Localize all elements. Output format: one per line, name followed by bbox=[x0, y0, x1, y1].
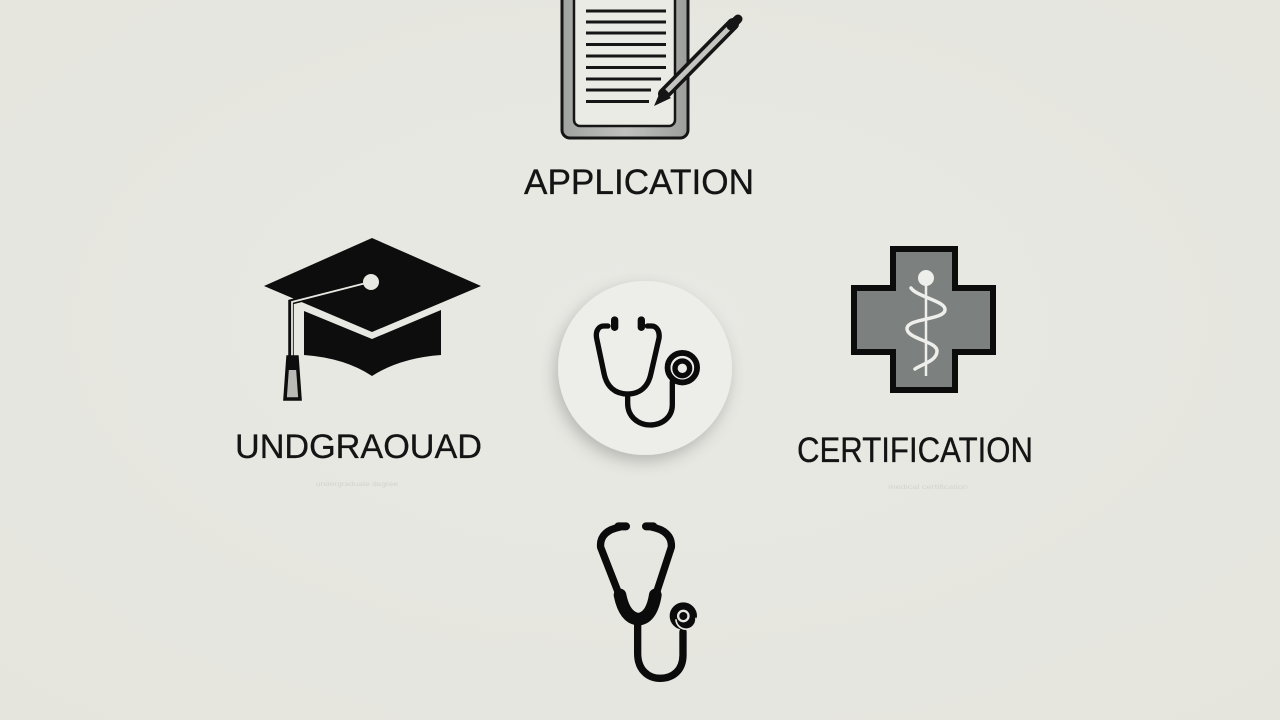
label: certification: CERTIFICATION bbox=[797, 431, 1033, 470]
badge disc bbox=[558, 281, 732, 455]
certification step bbox=[797, 249, 1033, 491]
faint caption: certification: medical certification bbox=[888, 485, 968, 491]
undergraduate step bbox=[235, 238, 482, 488]
label: undergrad: UNDGRAOUAD bbox=[235, 428, 482, 466]
central badge bbox=[558, 281, 732, 455]
residency step bbox=[601, 526, 696, 678]
icon: graduation cap bbox=[264, 238, 481, 399]
label: application: APPLICATION bbox=[524, 163, 754, 202]
icon: large stethoscope bbox=[601, 526, 696, 678]
faint caption: undergrad: undergraduate degree bbox=[316, 482, 399, 488]
icon: document and pen bbox=[562, 0, 738, 138]
icon: stethoscope in badge bbox=[596, 320, 697, 425]
application step bbox=[524, 0, 754, 202]
icon: medical cross with staff bbox=[854, 249, 993, 390]
